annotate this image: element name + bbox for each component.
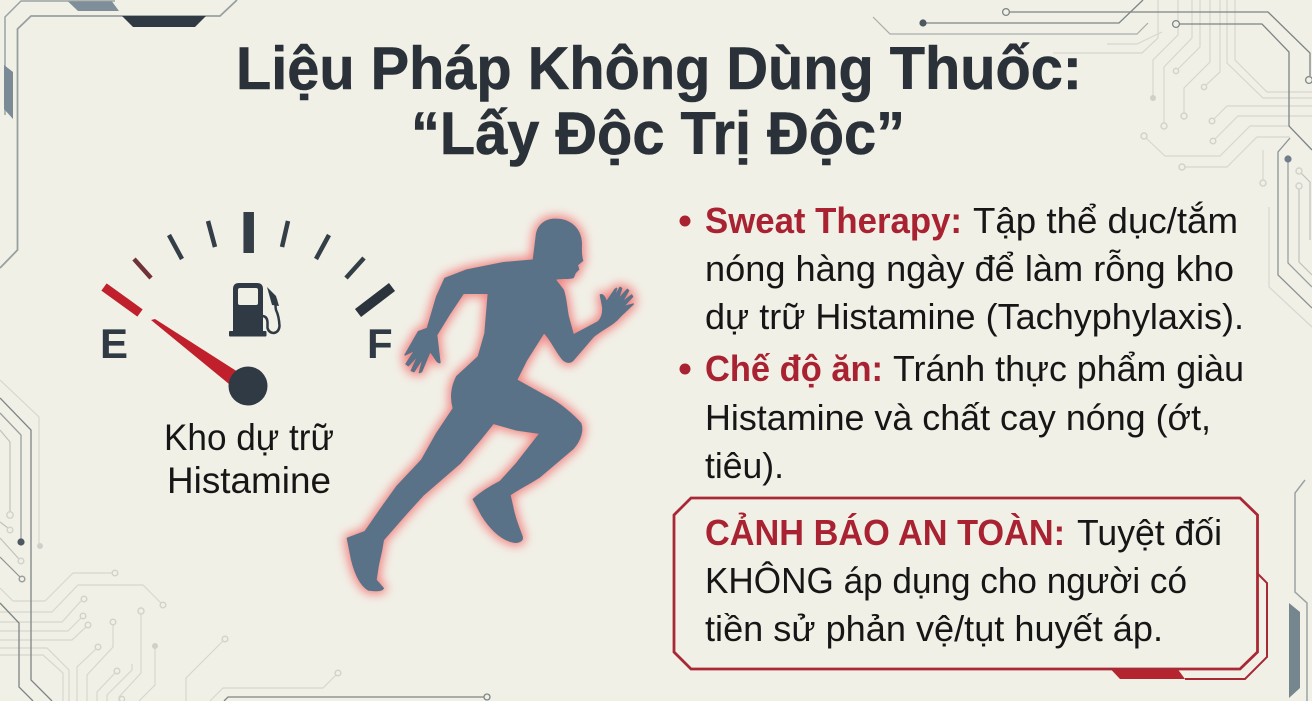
callout text: Tuyệt đối xyxy=(1077,512,1222,553)
callout text xyxy=(705,512,1222,649)
bullet: diet xyxy=(680,348,1244,486)
callout back frame xyxy=(1185,573,1267,679)
bullet: sweat therapy xyxy=(680,200,1244,337)
icon: fuel pump xyxy=(229,283,280,336)
circuit traces: bottom left xyxy=(0,398,490,701)
frame: right edge xyxy=(1289,480,1307,701)
circuit traces and frame: top right xyxy=(919,0,1312,308)
bullet: sweat therapy: Sweat Therapy: xyxy=(705,200,962,241)
callout text: tiền sử phản vệ/tụt huyết áp. xyxy=(705,608,1163,649)
gauge label xyxy=(164,417,334,501)
bullet: sweat therapy: nóng hàng ngày để làm rỗng kho xyxy=(705,248,1234,289)
title: Liệu Pháp Không Dùng Thuốc: xyxy=(236,35,1082,102)
callout text: CẢNH BÁO AN TOÀN: xyxy=(705,512,1065,553)
title: “Lấy Độc Trị Độc” xyxy=(411,100,905,167)
title xyxy=(236,35,1082,167)
bullet: diet: Chế độ ăn: xyxy=(705,348,883,389)
bullet: diet: Histamine và chất cay nóng (ớt, xyxy=(705,397,1211,438)
callout accent bar xyxy=(1111,670,1185,679)
letter F: F xyxy=(367,320,393,367)
gauge hub xyxy=(228,366,268,406)
frame: top left corner xyxy=(0,0,237,268)
gauge label: Histamine xyxy=(167,460,331,501)
gauge ticks xyxy=(104,212,392,313)
bullet list xyxy=(680,200,1244,486)
callout text: KHÔNG áp dụng cho người có xyxy=(705,560,1187,601)
gauge label: Kho dự trữ xyxy=(164,417,334,458)
running figure with red glow xyxy=(347,219,633,591)
bullet: diet: Tránh thực phẩm giàu xyxy=(893,348,1244,389)
fuel gauge xyxy=(100,212,393,501)
gauge needle xyxy=(151,319,238,384)
bullet: diet: tiêu). xyxy=(705,445,784,486)
letter E: E xyxy=(100,320,128,367)
bullet: sweat therapy: Tập thể dục/tắm xyxy=(973,200,1238,241)
bullet: sweat therapy: dự trữ Histamine (Tachyphylaxis). xyxy=(705,296,1244,337)
callout: safety warning xyxy=(674,498,1267,679)
callout frame xyxy=(674,498,1258,669)
